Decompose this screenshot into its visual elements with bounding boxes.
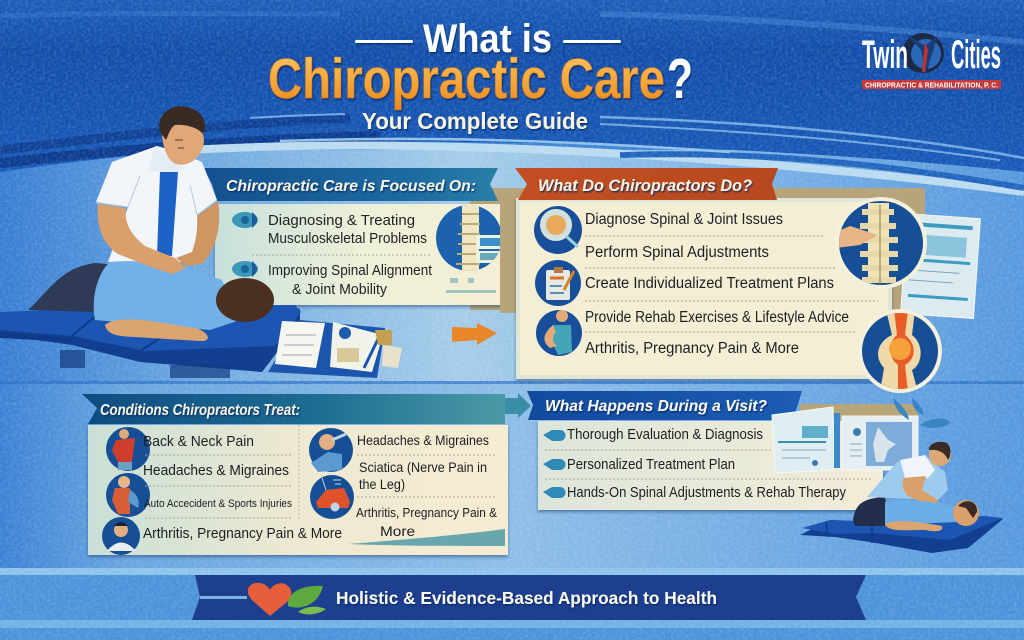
title: Your Complete Guide	[362, 108, 588, 134]
patient legs	[28, 263, 120, 312]
banner: visit: What Happens During a Visit?	[545, 398, 768, 415]
banner: conditions	[82, 394, 505, 424]
banner: what do chiropractors do: What Do Chiropractors Do?	[538, 177, 752, 195]
banner: visit	[527, 391, 802, 420]
list: visit: Hands-On Spinal Adjustments & Rehab Therapy	[567, 485, 847, 501]
icon: man	[102, 517, 140, 555]
list: do: Diagnose Spinal & Joint Issues	[585, 211, 783, 228]
icon: car accident	[310, 475, 354, 519]
logo: CHIROPRACTIC & REHABILITATION, P. C.	[865, 80, 998, 90]
list: do: Arthritis, Pregnancy Pain & More	[585, 340, 799, 357]
list: do	[585, 211, 849, 357]
focus list text	[268, 212, 433, 298]
list: visit: Thorough Evaluation & Diagnosis	[567, 427, 763, 443]
title: What is	[423, 17, 552, 61]
list: visit: Personalized Treatment Plan	[567, 457, 735, 473]
list: conditions left: Auto Accecident & Sports Injuries	[144, 498, 292, 510]
table	[0, 305, 301, 378]
leaves	[893, 398, 950, 428]
list: do: Perform Spinal Adjustments	[585, 244, 769, 261]
illustration: chiropractor treating patient	[0, 106, 402, 378]
list: do: Provide Rehab Exercises & Lifestyle Advice	[585, 309, 849, 326]
icon: clipboard	[535, 260, 581, 306]
icon: magnifier	[534, 206, 582, 254]
arrow: orange	[452, 323, 497, 345]
banner: conditions: Conditions Chiropractors Treat:	[100, 402, 300, 419]
icon: spine circle	[436, 205, 504, 271]
focus list text: Musculoskeletal Problems	[268, 230, 427, 247]
clipboard and documents	[268, 320, 402, 378]
documents	[772, 407, 918, 473]
title: Chiropractic Care	[268, 47, 665, 111]
therapist arms and hands	[98, 201, 219, 274]
focus list text: Improving Spinal Alignment	[268, 262, 433, 279]
list: conditions left: Arthritis, Pregnancy Pain & More	[143, 526, 342, 542]
icon: headache	[309, 428, 353, 472]
list: conditions right	[356, 432, 497, 539]
icon: shoulder pain	[106, 473, 150, 517]
panel: what chiropractors do	[500, 168, 980, 393]
footer banner: Holistic & Evidence-Based Approach to Health	[336, 588, 717, 608]
icon: heart and leaves	[248, 583, 326, 616]
therapist body	[96, 106, 217, 262]
logo: Twin	[862, 33, 908, 77]
icon: woman exercising	[536, 310, 582, 356]
panel: what happens during a visit	[527, 391, 950, 510]
title	[268, 17, 693, 134]
icon: back pain	[106, 427, 150, 471]
list: conditions right: Headaches & Migraines	[357, 432, 489, 448]
panel: conditions	[82, 393, 531, 555]
banner: focused on	[203, 168, 498, 201]
banner: what do chiropractors do	[515, 168, 778, 200]
bullet icon 1	[232, 212, 258, 228]
banner: focused on: Chiropractic Care is Focused On:	[226, 178, 476, 195]
icon: spine with pointing hand	[835, 197, 927, 290]
logo	[862, 33, 1001, 90]
focus list text: Diagnosing & Treating	[268, 212, 415, 229]
bullet icon 2	[232, 261, 258, 277]
footer banner	[192, 575, 866, 620]
title: ?	[667, 47, 693, 111]
list: conditions left: Headaches & Migraines	[143, 462, 289, 479]
panel: chiropractic care focus	[203, 168, 512, 310]
patient	[94, 261, 274, 341]
list: do: Create Individualized Treatment Plans	[585, 275, 834, 292]
icon: knee joint	[858, 309, 942, 393]
list: conditions right: More	[380, 523, 415, 539]
illustration: small treatment scene	[800, 442, 1003, 553]
list: conditions left: Back & Neck Pain	[143, 433, 254, 450]
list: conditions right: Arthritis, Pregnancy Pain &	[356, 505, 497, 520]
arrow: teal	[505, 393, 531, 418]
focus list text: & Joint Mobility	[292, 281, 387, 298]
list: conditions left	[143, 433, 342, 542]
list: visit	[567, 427, 847, 501]
list: conditions right: Sciatica (Nerve Pain in	[359, 459, 487, 475]
list: conditions right: the Leg)	[359, 476, 405, 492]
document illustration	[901, 214, 980, 318]
bullets: visit	[543, 430, 566, 498]
